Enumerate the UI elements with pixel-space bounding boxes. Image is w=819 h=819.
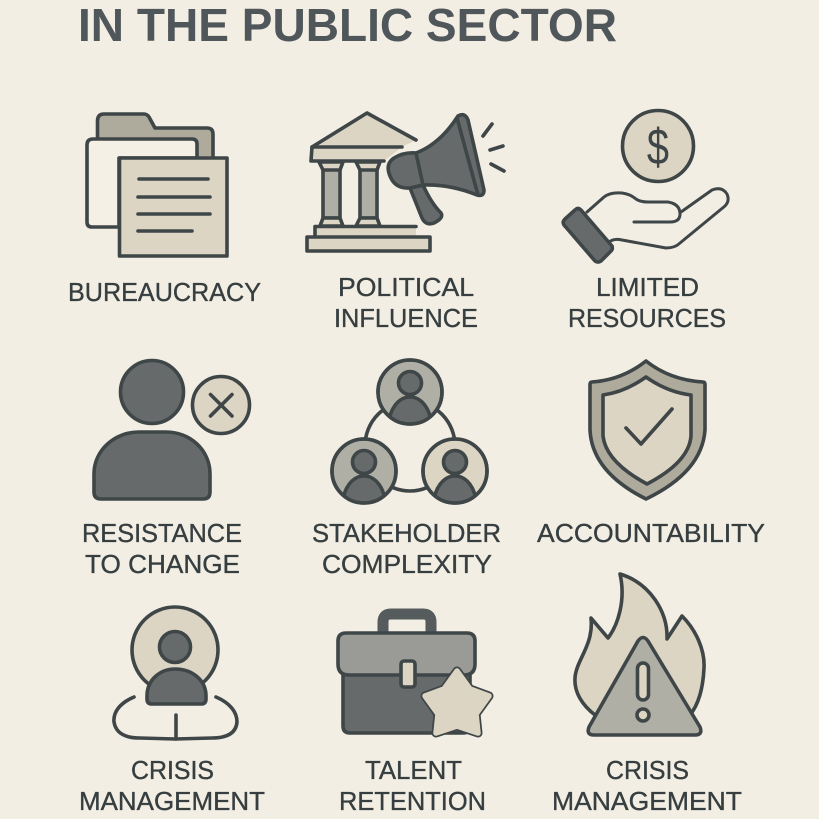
label: talent retention: TALENT <box>365 757 462 785</box>
label: resistance to change: RESISTANCE <box>82 520 242 548</box>
icon: crisis management person <box>114 607 237 739</box>
icon: government building with megaphone <box>307 113 504 251</box>
label: stakeholder complexity: COMPLEXITY <box>322 551 492 579</box>
icon: connected stakeholders <box>330 358 489 505</box>
label: political influence: POLITICAL <box>338 274 474 302</box>
label: political influence <box>334 274 478 333</box>
icon: person with rejection mark <box>94 360 250 499</box>
label: crisis management repeat <box>552 757 742 816</box>
icon: shield with check mark <box>590 361 705 499</box>
label: limited resources: LIMITED <box>596 274 699 302</box>
label: crisis management: CRISIS <box>131 757 214 785</box>
label: stakeholder complexity <box>312 520 501 579</box>
megaphone <box>388 115 484 224</box>
label: crisis management repeat: CRISIS <box>606 757 689 785</box>
star <box>425 671 489 733</box>
label: political influence: INFLUENCE <box>334 305 478 333</box>
label: resistance to change <box>82 520 242 579</box>
icon: hand holding coin <box>563 110 728 262</box>
icon: bureaucracy folders and document <box>87 114 227 256</box>
label: talent retention: RETENTION <box>339 788 486 816</box>
label: crisis management: MANAGEMENT <box>79 788 265 816</box>
stakeholder top <box>376 358 444 426</box>
label: limited resources: RESOURCES <box>568 305 726 333</box>
label: talent retention <box>339 757 486 816</box>
label: stakeholder complexity: STAKEHOLDER <box>312 520 501 548</box>
icon: flame with warning triangle <box>575 574 704 735</box>
icon: hand holding coin: $ <box>647 118 669 175</box>
label: resistance to change: TO CHANGE <box>85 551 240 579</box>
title: IN THE PUBLIC SECTOR <box>78 0 617 51</box>
label: bureaucracy: BUREAUCRACY <box>68 279 261 307</box>
label: limited resources <box>568 274 726 333</box>
stakeholder right <box>421 437 489 505</box>
icon: briefcase with star <box>338 614 489 733</box>
stakeholder left <box>330 437 398 505</box>
label: accountability: ACCOUNTABILITY <box>537 520 765 548</box>
label: crisis management <box>79 757 265 816</box>
label: crisis management repeat: MANAGEMENT <box>552 788 742 816</box>
